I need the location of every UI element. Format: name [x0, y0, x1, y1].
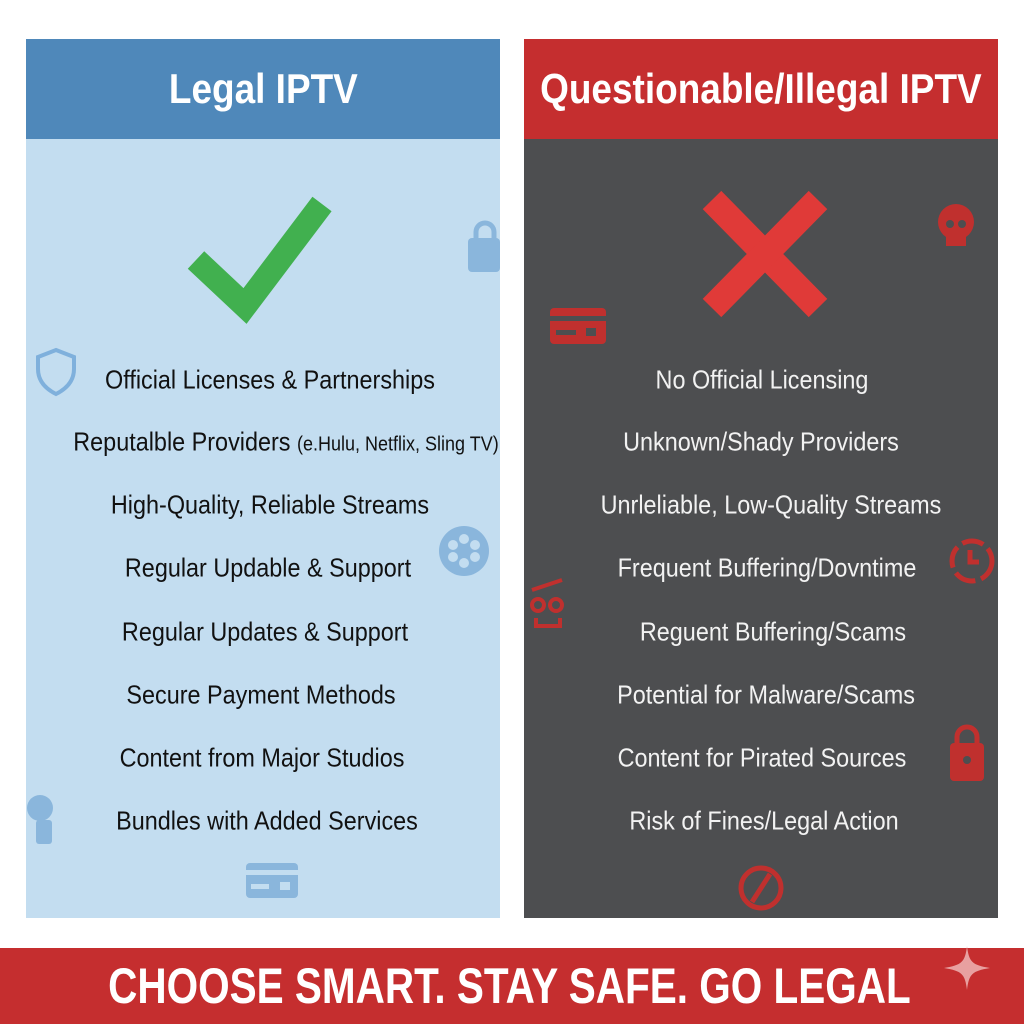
panel: legal [26, 39, 500, 918]
icon: lock right [950, 727, 984, 781]
icon: sparkle [944, 946, 990, 990]
text list: legal: High-Quality, Reliable Streams [111, 490, 429, 520]
text list: illegal: Reguent Buffering/Scams [640, 616, 906, 646]
heading: Legal IPTV [26, 39, 500, 139]
banner [0, 948, 1024, 1024]
text list: illegal: Unknown/Shady Providers [623, 426, 899, 456]
icon: lock left [468, 223, 500, 272]
text list: legal: Regular Updable & Support [125, 552, 411, 582]
icon: skull [938, 204, 974, 246]
icon: no symbol [741, 868, 781, 908]
text list: legal: Official Licenses & Partnerships [105, 364, 435, 394]
text list: illegal: Potential for Malware/Scams [617, 680, 915, 710]
heading: Questionable/Illegal IPTV: Questionable/Illegal IPTV [540, 65, 982, 112]
icon: checkmark [196, 204, 322, 306]
icon: red X [712, 200, 818, 308]
icon: shield [38, 350, 74, 394]
panel: illegal [524, 39, 998, 918]
icon: tool [532, 580, 562, 626]
text list: legal: Reputalble Providers (e.Hulu, Netflix, Sling TV) [73, 426, 499, 456]
banner text: CHOOSE SMART. STAY SAFE. GO LEGAL [108, 958, 910, 1014]
text list: illegal: Content for Pirated Sources [618, 742, 906, 772]
heading: Questionable/Illegal IPTV [524, 39, 998, 139]
icon: card left [246, 863, 298, 898]
icon: card right [550, 308, 606, 344]
icon: film reel [439, 526, 489, 576]
text list: illegal: Unrleliable, Low-Quality Streams [601, 490, 941, 520]
text list: legal: Regular Updates & Support [122, 616, 408, 646]
text list: illegal: Frequent Buffering/Dovntime [618, 552, 916, 582]
text list: illegal: No Official Licensing [656, 364, 868, 394]
heading: Legal IPTV: Legal IPTV [169, 65, 357, 112]
icon: person [27, 795, 53, 844]
text list: legal: Secure Payment Methods [126, 680, 396, 710]
text list: illegal: Risk of Fines/Legal Action [629, 806, 899, 836]
text list: legal: Bundles with Added Services [116, 806, 418, 836]
icon: clock [952, 541, 992, 581]
text list: legal: Content from Major Studios [120, 742, 404, 772]
